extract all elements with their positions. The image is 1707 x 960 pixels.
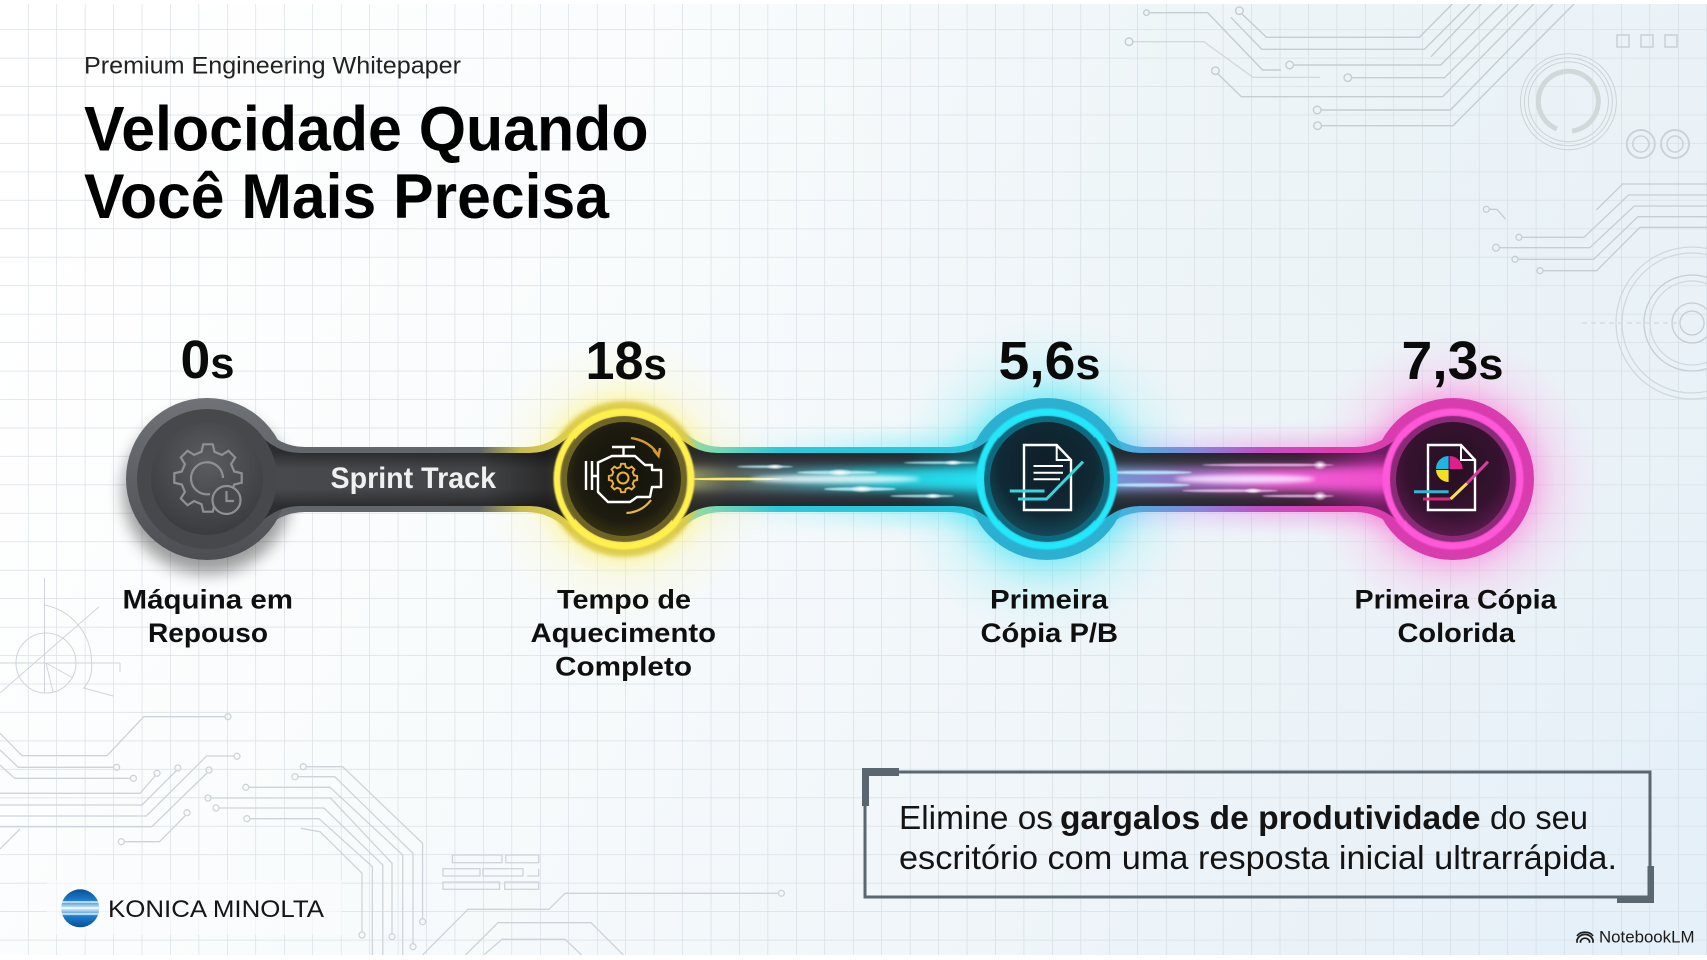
sprint track bbox=[126, 398, 1534, 560]
header bbox=[84, 52, 648, 232]
icon: notebook arcs bbox=[1577, 932, 1593, 943]
callout text: Elimine os bbox=[899, 799, 1053, 836]
node bbox=[1386, 412, 1520, 546]
label: Primeira bbox=[990, 584, 1109, 614]
title: Você Mais Precisa bbox=[84, 162, 610, 232]
label: Tempo de bbox=[557, 584, 691, 614]
callout text bbox=[899, 799, 1617, 876]
callout text: do seu bbox=[1490, 799, 1588, 836]
callout frame bbox=[862, 768, 1654, 903]
label: Primeira Cópia bbox=[1354, 584, 1558, 614]
node bbox=[980, 412, 1114, 546]
callout bbox=[862, 768, 1654, 903]
NotebookLM watermark bbox=[1577, 928, 1694, 947]
wordmark: KONICA MINOLTA bbox=[108, 896, 324, 923]
compass drawing bbox=[0, 578, 120, 696]
node bbox=[557, 412, 691, 546]
time value: 0s bbox=[180, 330, 234, 390]
label: Cópia P/B bbox=[980, 618, 1118, 648]
icon: gear with clock bbox=[174, 444, 242, 514]
label: Máquina em bbox=[122, 584, 293, 614]
icon: globe bbox=[61, 889, 99, 927]
step 2: warm-up bbox=[530, 331, 716, 682]
time value: 7,3s bbox=[1402, 331, 1504, 391]
label: Completo bbox=[555, 652, 692, 682]
circuit decoration: lower left bbox=[0, 714, 784, 955]
label: Colorida bbox=[1398, 618, 1516, 648]
node housings bbox=[126, 398, 1534, 560]
track core bbox=[255, 430, 1405, 528]
callout text: gargalos de produtividade bbox=[1060, 799, 1480, 836]
icon: color document with check bbox=[1414, 445, 1488, 510]
circuit decoration: top right bbox=[1125, 4, 1574, 130]
track shell bbox=[259, 424, 1401, 534]
window squares and gauges bbox=[1520, 35, 1689, 158]
label: Repouso bbox=[148, 618, 268, 648]
circuit decoration: right bbox=[1483, 184, 1707, 399]
time value: 5,6s bbox=[998, 331, 1101, 391]
label bbox=[1354, 584, 1558, 648]
track label: Sprint Track bbox=[330, 462, 496, 495]
watermark text: NotebookLM bbox=[1599, 928, 1694, 947]
eyebrow: Premium Engineering Whitepaper bbox=[84, 52, 461, 80]
speed streaks bbox=[687, 460, 1334, 501]
node bbox=[137, 409, 277, 549]
step 1: machine at rest bbox=[122, 330, 293, 648]
track shading bbox=[255, 430, 1405, 528]
label: Aquecimento bbox=[530, 618, 716, 648]
label bbox=[980, 584, 1118, 648]
glows bbox=[123, 319, 1603, 639]
label bbox=[122, 584, 293, 648]
callout text: escritório com uma resposta inicial ultrarrápida. bbox=[899, 839, 1617, 876]
title bbox=[84, 94, 648, 232]
icon: document with check bbox=[1010, 445, 1083, 510]
step 4: first color copy bbox=[1354, 331, 1558, 648]
label bbox=[530, 584, 716, 682]
step 3: first black and white copy bbox=[980, 331, 1118, 648]
title: Velocidade Quando bbox=[84, 94, 648, 164]
time value: 18s bbox=[586, 331, 667, 391]
icon: engine with gear bbox=[586, 438, 661, 513]
logo: Konica Minolta bbox=[47, 880, 342, 935]
